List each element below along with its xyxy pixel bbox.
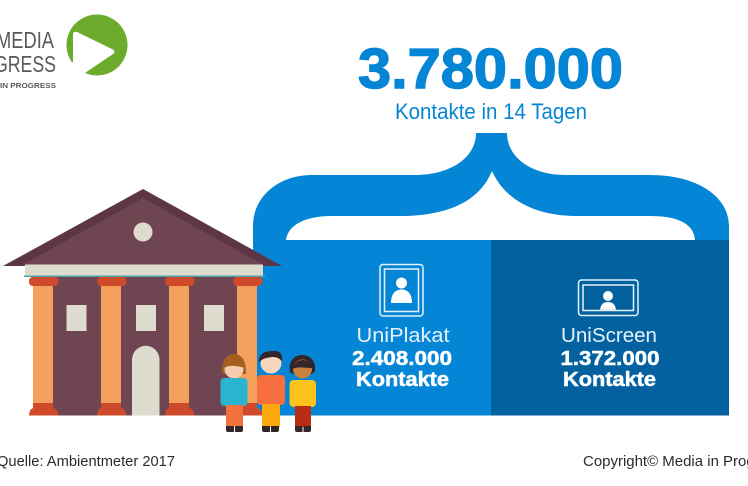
value: 2.408.000 Kontakte: 2.408.000 [352, 348, 452, 370]
building wall [38, 276, 254, 416]
windows [66, 305, 224, 331]
logo icon: green play circle [62, 14, 128, 78]
value: 1.372.000 Kontakte: Kontakte [563, 369, 656, 391]
headline total [358, 37, 623, 124]
person: woman in teal [220, 354, 248, 432]
people group [220, 351, 316, 432]
label: UniScreen: UniScreen [561, 324, 657, 347]
logo wordmark: IN PROGRESS [0, 81, 56, 90]
curly bracket joining both panels [253, 133, 729, 245]
logo wordmark [0, 27, 56, 90]
value: 1.372.000 Kontakte [560, 348, 660, 391]
panel: UniPlakat [253, 240, 491, 416]
logo: Media in Progress [0, 14, 128, 90]
value: 2.408.000 Kontakte: Kontakte [356, 369, 449, 391]
door [132, 346, 160, 416]
label: UniPlakat: UniPlakat [356, 324, 450, 347]
entablature [25, 264, 263, 276]
pediment [23, 198, 263, 264]
columns [29, 277, 262, 416]
person: woman in yellow [290, 355, 316, 432]
pediment window [134, 222, 152, 242]
value: 1.372.000 Kontakte: 1.372.000 [560, 348, 660, 370]
headline subtitle: Kontakte in 14 Tagen [395, 99, 587, 124]
source note: Quelle: Ambientmeter 2017 [0, 454, 175, 470]
person: man in orange [257, 351, 285, 432]
roof [3, 189, 282, 266]
total number: 3.780.000 [358, 37, 623, 101]
value: 2.408.000 Kontakte [352, 348, 452, 391]
building illustration [3, 189, 282, 416]
icon: poster with person [380, 264, 423, 316]
panel: UniScreen [491, 240, 729, 416]
icon: screen with person [578, 280, 638, 316]
